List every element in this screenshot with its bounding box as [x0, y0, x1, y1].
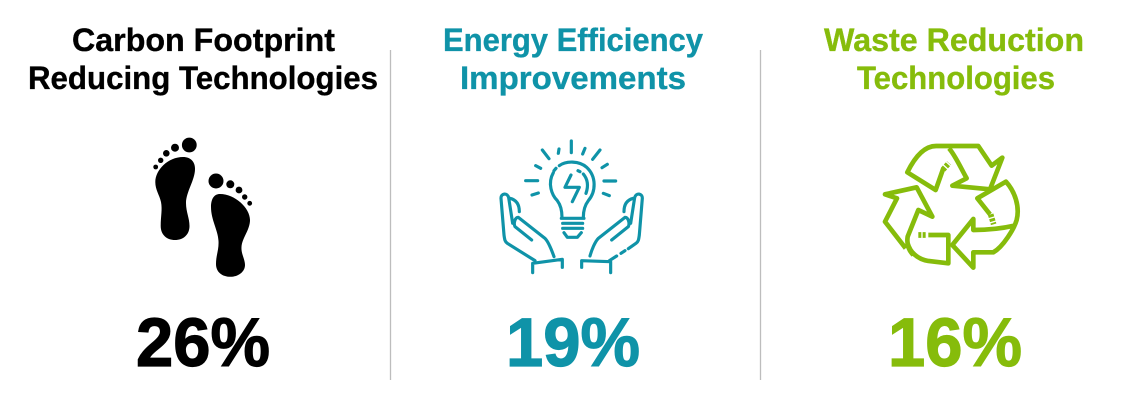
heading: carbon footprint: Carbon Footprint: [72, 22, 335, 58]
heading: energy efficiency: Energy Efficiency: [443, 22, 703, 58]
icon: light bulb in hands: [501, 141, 642, 273]
heading: carbon footprint: [28, 22, 378, 96]
icon: recycling arrows: [885, 146, 1018, 268]
panel: carbon footprint: [28, 22, 378, 381]
panel: energy efficiency: [443, 22, 703, 381]
panel: waste reduction: [824, 22, 1084, 381]
heading: waste reduction: [824, 22, 1084, 96]
icon: footprints: [153, 138, 252, 277]
heading: energy efficiency: Improvements: [460, 60, 686, 96]
value: 19%: 19%: [506, 304, 640, 381]
heading: waste reduction: Waste Reduction: [824, 22, 1084, 58]
heading: waste reduction: Technologies: [857, 60, 1055, 96]
heading: carbon footprint: Reducing Technologies: [28, 60, 378, 96]
value: 16%: 16%: [888, 304, 1022, 381]
heading: energy efficiency: [443, 22, 703, 96]
value: 26%: 26%: [136, 304, 270, 381]
